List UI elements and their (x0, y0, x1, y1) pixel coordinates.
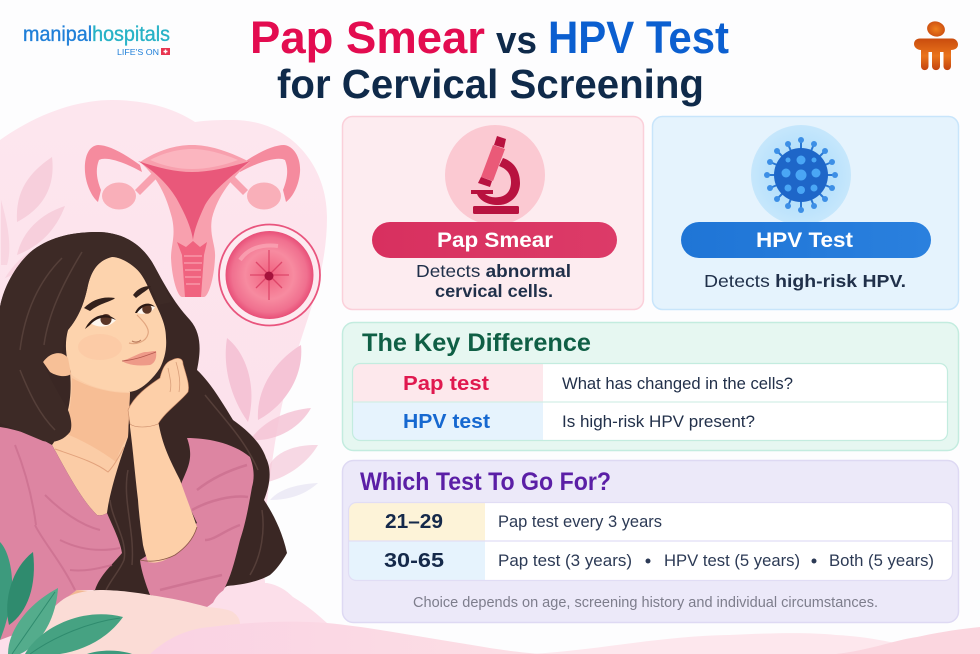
panel: Which Test To Go For (342, 460, 958, 622)
comparison table: Is high-risk HPV present? (562, 412, 755, 431)
sleeve folds (160, 465, 248, 590)
small hand under arm (66, 590, 90, 598)
illustration: woman (0, 232, 327, 654)
arm (130, 420, 197, 563)
title: Pap Smear (250, 12, 485, 63)
cheek blush (78, 334, 122, 360)
icon: microscope (471, 136, 520, 214)
ear (43, 353, 71, 376)
comparison table: What has changed in the cells? (562, 374, 793, 393)
HPV Test pill (681, 222, 931, 258)
hair back (0, 232, 287, 600)
Pap Smear description: Detects abnormal (416, 261, 571, 281)
icon: orange person logo (914, 19, 958, 70)
decorative leaves right (226, 338, 318, 500)
screening table (348, 502, 952, 580)
logo: manipal hospitals (23, 23, 170, 57)
right sleeve (140, 438, 254, 607)
Pap Smear description (416, 261, 571, 301)
pillow (43, 590, 240, 654)
HPV Test description: Detects high-risk HPV. (704, 271, 906, 291)
Pap Smear description: cervical cells. (435, 281, 553, 301)
heading: Which Test To Go For? (360, 468, 611, 496)
lips (122, 351, 156, 366)
footnote: Choice depends on age, screening history and individual circumstances. (413, 595, 878, 611)
screening table: Pap test every 3 years (498, 512, 662, 531)
screening table: Pap test (3 years) (498, 551, 632, 570)
panel: Pap Smear (342, 116, 644, 310)
title: HPV Test (548, 12, 729, 63)
green leaves (0, 542, 132, 654)
hand (128, 358, 189, 427)
hair front (0, 232, 172, 442)
panel: The Key Difference (342, 322, 958, 450)
title: for Cervical Screening (277, 61, 704, 107)
comparison table (352, 364, 948, 440)
logo: manipal hospitals: LIFE'S ON (117, 48, 159, 57)
neck shadow (62, 378, 130, 462)
bottom wave (150, 622, 980, 654)
comparison table: Pap test (403, 373, 489, 395)
heading: The Key Difference (362, 329, 591, 357)
screening table: 21–29 (385, 511, 443, 533)
shirt folds (15, 445, 120, 590)
left eye (90, 315, 116, 327)
panel: HPV Test (652, 116, 958, 310)
Pap Smear pill: Pap Smear (437, 229, 553, 252)
screening table: 30-65 (384, 550, 444, 572)
eyebrows (84, 286, 151, 311)
screening table: Both (5 years) (829, 551, 934, 570)
title: vs (496, 20, 537, 62)
nose (129, 315, 148, 344)
HPV Test pill: HPV Test (756, 229, 853, 252)
hair highlights (20, 252, 82, 430)
screening table: HPV test (5 years) (664, 551, 800, 570)
comparison table: HPV test (403, 411, 490, 433)
icon: virus (764, 137, 838, 213)
shirt body (0, 427, 122, 640)
face (66, 257, 166, 392)
decorative leaves left (1, 157, 65, 278)
hair strands (106, 395, 263, 590)
chest and neck (52, 372, 130, 515)
icon: uterus anatomy (85, 145, 300, 297)
icon: cervix circle (219, 224, 320, 326)
logo: manipal hospitals: manipalhospitals (23, 23, 170, 46)
second pillow (213, 583, 327, 640)
right eye (136, 305, 155, 314)
background blobs (0, 100, 327, 654)
title (250, 12, 729, 107)
Pap Smear pill (372, 222, 617, 258)
